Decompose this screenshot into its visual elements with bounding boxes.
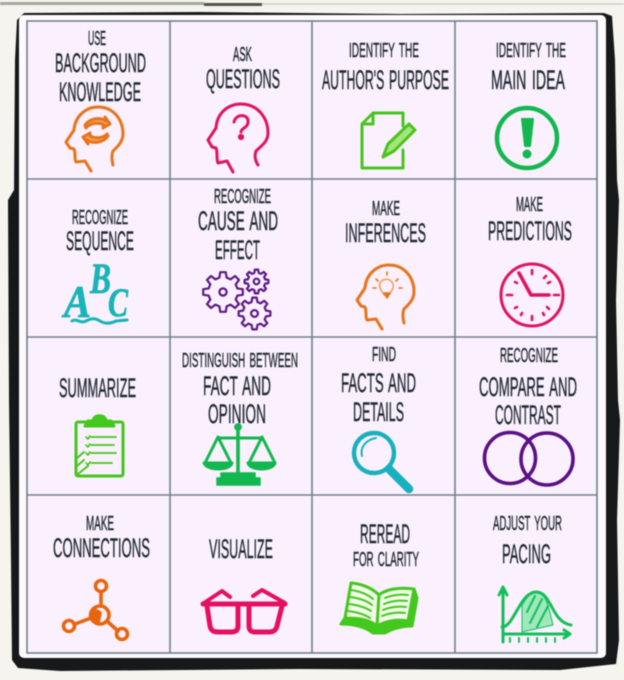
heading: RECOGNIZE <box>72 207 128 229</box>
heading: OPINION <box>208 399 266 429</box>
icon: gears <box>203 270 270 329</box>
text: KNOWLEDGE <box>59 77 141 107</box>
heading: RECOGNIZE <box>214 186 271 208</box>
icon: clipboard checklist <box>76 416 123 476</box>
text: CONNECTIONS <box>53 533 150 563</box>
text: DISTINGUISH BETWEEN <box>182 350 298 372</box>
heading: RECOGNIZE <box>500 345 558 367</box>
text: FOR CLARITY <box>353 549 419 571</box>
heading: REREAD <box>360 519 410 549</box>
cell: recognize sequence <box>61 207 134 327</box>
heading <box>322 40 449 95</box>
icon: letters ABC: A <box>61 277 91 327</box>
heading <box>182 350 298 429</box>
heading <box>491 40 566 95</box>
cell: compare and contrast <box>479 345 577 485</box>
icon: head with question mark <box>208 104 268 172</box>
cell: identify the author's purpose <box>322 40 449 168</box>
icon: head with light bulb <box>357 265 414 329</box>
text: AUTHOR'S PURPOSE <box>322 65 449 95</box>
icon: letters ABC: C <box>108 280 129 325</box>
icon: open book <box>341 583 417 633</box>
cell: cause and effect <box>198 186 278 329</box>
heading: FIND <box>372 344 396 366</box>
heading <box>55 28 146 107</box>
cell: ask questions <box>206 44 280 172</box>
icon: magnifying glass <box>354 433 409 489</box>
heading: IDENTIFY THE <box>349 40 419 62</box>
heading <box>341 344 416 427</box>
icon: glasses <box>203 590 285 632</box>
heading: USE <box>88 28 106 50</box>
icon: head with arrows <box>66 107 123 171</box>
icon: overlapping circles <box>484 432 573 485</box>
heading: MAKE <box>516 194 543 216</box>
heading <box>488 194 572 246</box>
icon: connected nodes <box>64 580 128 640</box>
text: INFERENCES <box>345 218 426 248</box>
heading <box>53 513 150 563</box>
text: FACTS AND <box>341 368 416 398</box>
heading: EFFECT <box>215 235 260 265</box>
heading: FACT AND <box>203 371 271 401</box>
icon: exclamation mark in circle <box>497 108 557 168</box>
heading <box>206 44 280 94</box>
heading: MAKE <box>86 513 114 535</box>
heading: MAKE <box>372 198 400 220</box>
heading <box>493 513 562 569</box>
heading <box>198 186 278 265</box>
cell: make predictions <box>488 194 572 326</box>
heading: ASK <box>233 44 252 66</box>
cell: facts and details <box>341 344 416 489</box>
icon: balance scales <box>204 425 275 485</box>
cell: make connections <box>53 513 150 640</box>
cell: fact and opinion <box>182 350 298 485</box>
cell: use background knowledge <box>55 28 146 171</box>
cell: summarize <box>59 373 136 476</box>
text: SUMMARIZE <box>59 373 136 403</box>
cell: identify the main idea <box>491 40 566 168</box>
heading <box>353 519 419 571</box>
cell: make inferences <box>345 198 426 329</box>
icon: letters ABC: B <box>89 256 111 303</box>
icon: bell curve chart <box>499 587 571 642</box>
heading: CAUSE AND <box>198 206 278 236</box>
icon: document and pencil <box>362 113 415 168</box>
heading <box>479 345 577 430</box>
icon: letters ABC <box>61 256 129 327</box>
cell: visualize <box>203 534 285 632</box>
icon: clock <box>501 264 563 326</box>
cell: adjust your pacing <box>493 513 571 642</box>
text: QUESTIONS <box>206 64 280 94</box>
heading: PACING <box>502 539 551 569</box>
heading <box>345 198 426 248</box>
cell: visualize: VISUALIZE <box>209 534 273 564</box>
text: SEQUENCE <box>66 226 134 256</box>
heading: DETAILS <box>353 397 404 427</box>
heading <box>66 207 134 256</box>
cell: reread for clarity <box>341 519 419 633</box>
text: BACKGROUND <box>55 48 146 78</box>
